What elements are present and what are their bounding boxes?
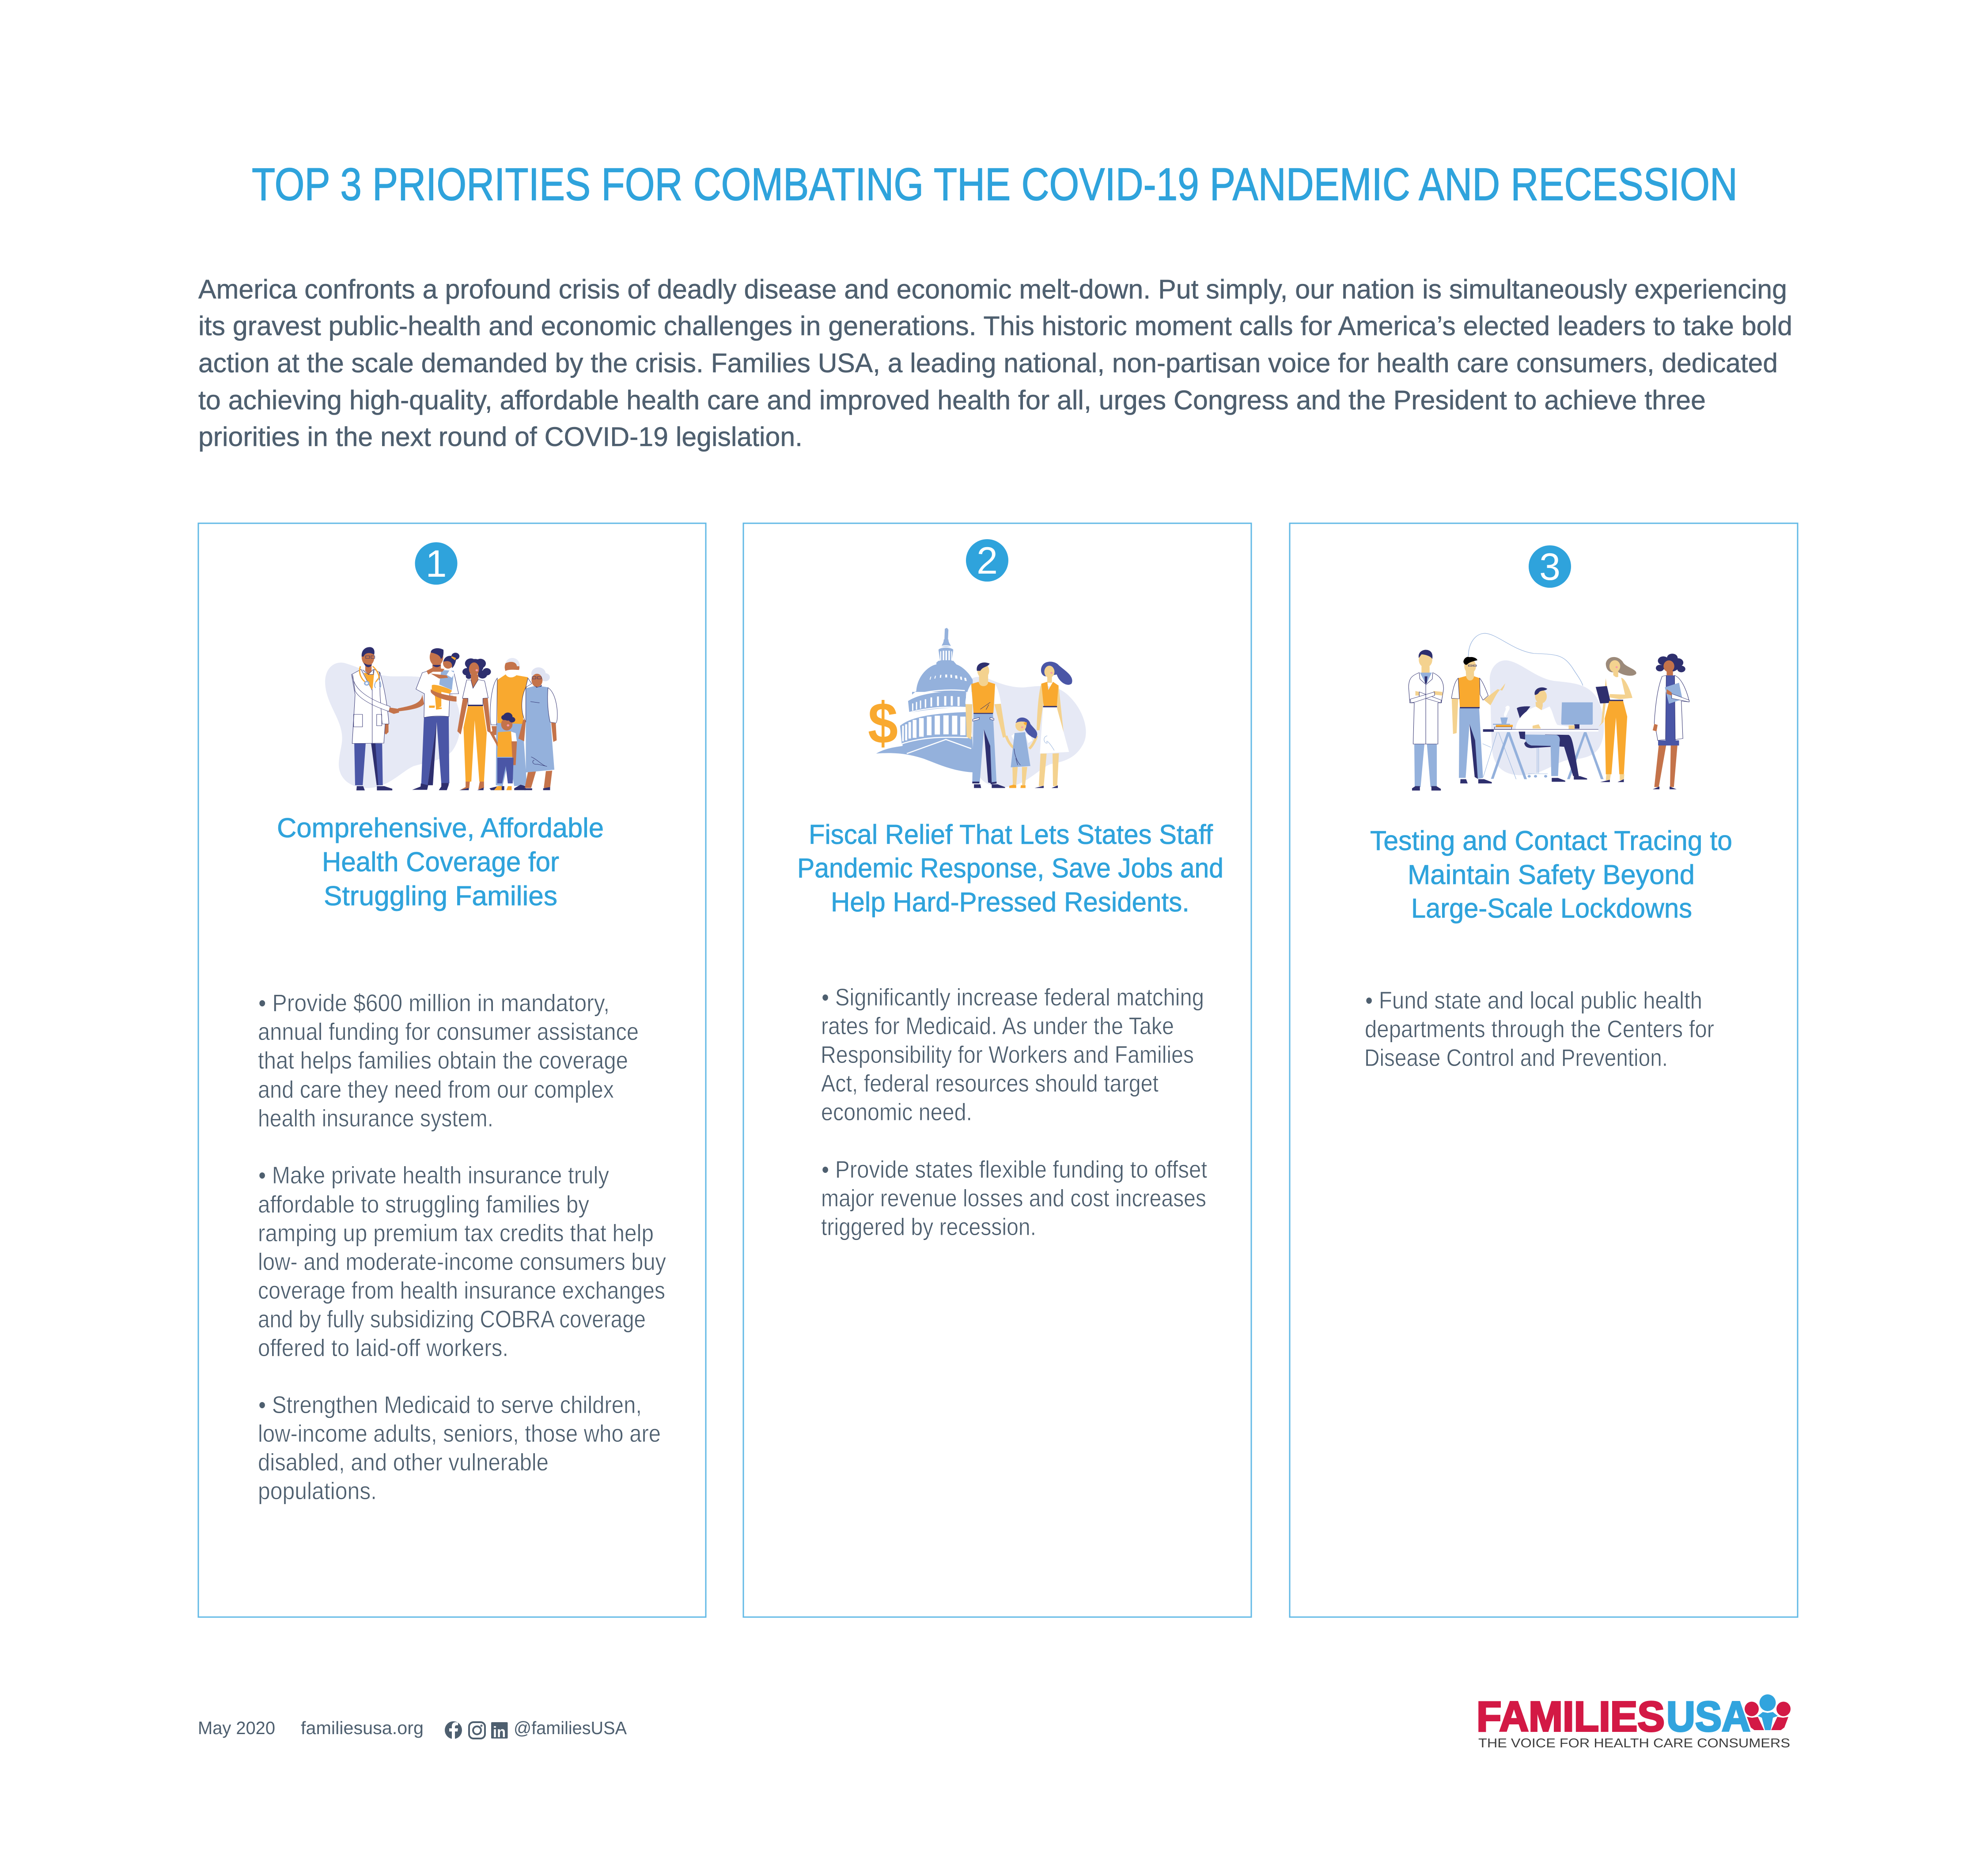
bullet text 1: and by fully subsidizing COBRA coverage <box>258 1305 646 1333</box>
panel: priority 1 <box>198 523 706 1617</box>
heading 1: Health Coverage for <box>322 847 559 877</box>
bullet text 2: Act, federal resources should target <box>821 1070 1159 1097</box>
bullet text 1: and care they need from our complex <box>258 1076 614 1103</box>
number badge 3: 3 <box>1539 546 1560 588</box>
bullet text 1: offered to laid-off workers. <box>258 1334 508 1361</box>
bullet text 3: • Fund state and local public health <box>1365 986 1702 1014</box>
icon: linkedin: in <box>493 1724 506 1741</box>
logo: Families USA: FAMILIES <box>1477 1693 1665 1740</box>
number badge 1: 1 <box>426 543 447 585</box>
heading 1 <box>277 813 604 911</box>
bullet text 1: • Make private health insurance truly <box>258 1161 609 1189</box>
bullet text 2 <box>821 983 1207 1240</box>
bullet text 1: ramping up premium tax credits that help <box>258 1219 654 1247</box>
icon: dollar sign: $ <box>868 691 898 756</box>
number badge 2: 2 <box>977 540 998 582</box>
intro paragraph: priorities in the next round of COVID-19 legislation. <box>198 422 803 452</box>
logo: Families USA: USA <box>1666 1693 1750 1740</box>
icon: facebook <box>445 1721 462 1739</box>
heading 3: Testing and Contact Tracing to <box>1370 826 1732 856</box>
intro paragraph: to achieving high-quality, affordable health care and improved health for all, urges Congress and the President to achieve three <box>198 385 1706 415</box>
number badge 2 <box>966 539 1008 582</box>
number badge 3 <box>1529 545 1571 588</box>
logo: Families USA: THE VOICE FOR HEALTH CARE CONSUMERS <box>1478 1736 1790 1750</box>
bullet text 2: • Provide states flexible funding to offset <box>822 1156 1207 1183</box>
bullet text 1: health insurance system. <box>258 1104 493 1132</box>
intro paragraph <box>198 274 1792 452</box>
panel: priority 2 <box>743 523 1251 1617</box>
bullet text 2: • Significantly increase federal matching <box>822 983 1204 1011</box>
bullet text 1: that helps families obtain the coverage <box>258 1047 628 1074</box>
intro paragraph: its gravest public-health and economic challenges in generations. This historic moment calls for America’s elected leaders to take bold <box>198 311 1792 341</box>
intro paragraph: action at the scale demanded by the crisis. Families USA, a leading national, non-partisan voice for health care consumers, dedicated <box>198 348 1778 378</box>
bullet text 1: populations. <box>258 1477 377 1504</box>
bullet text 1: • Strengthen Medicaid to serve children, <box>258 1391 642 1418</box>
heading 2: Help Hard-Pressed Residents. <box>831 887 1189 918</box>
bullet text 3 <box>1364 986 1714 1071</box>
bullet text 1: low- and moderate-income consumers buy <box>258 1248 666 1275</box>
heading 3: Large-Scale Lockdowns <box>1411 893 1692 924</box>
heading 2 <box>797 820 1223 918</box>
footer website: familiesusa.org <box>301 1718 424 1738</box>
heading 3: Maintain Safety Beyond <box>1408 860 1695 890</box>
bullet text 2: rates for Medicaid. As under the Take <box>821 1012 1174 1039</box>
number badge 1 <box>415 542 458 585</box>
heading 3 <box>1370 826 1732 924</box>
bullet text 1 <box>258 989 666 1504</box>
bullet text 3: departments through the Centers for <box>1365 1015 1714 1043</box>
footer date: May 2020 <box>198 1718 275 1738</box>
heading 1: Comprehensive, Affordable <box>277 813 604 843</box>
illustration: doctor greeting a family <box>325 647 557 790</box>
title: TOP 3 PRIORITIES FOR COMBATING THE COVID-19 PANDEMIC AND RECESSION <box>252 159 1738 210</box>
heading 1: Struggling Families <box>324 881 557 911</box>
footer social handle: @familiesUSA <box>514 1718 627 1738</box>
logo: Families USA <box>1477 1693 1791 1750</box>
bullet text 1: coverage from health insurance exchanges <box>258 1277 665 1304</box>
bullet text 2: major revenue losses and cost increases <box>821 1184 1206 1212</box>
bullet text 2: triggered by recession. <box>821 1213 1036 1240</box>
heading 2: Pandemic Response, Save Jobs and <box>797 853 1223 884</box>
bullet text 1: annual funding for consumer assistance <box>258 1018 639 1045</box>
illustration: capitol building and family <box>876 628 1086 788</box>
bullet text 2: economic need. <box>821 1098 972 1126</box>
bullet text 1: affordable to struggling families by <box>258 1191 589 1218</box>
panel: priority 3 <box>1290 523 1798 1617</box>
bullet text 1: • Provide $600 million in mandatory, <box>258 989 610 1017</box>
bullet text 3: Disease Control and Prevention. <box>1364 1044 1668 1071</box>
heading 2: Fiscal Relief That Lets States Staff <box>809 820 1213 850</box>
bullet text 1: low-income adults, seniors, those who are <box>258 1420 661 1447</box>
bullet text 1: disabled, and other vulnerable <box>258 1448 549 1476</box>
icon: instagram <box>469 1722 485 1739</box>
intro paragraph: America confronts a profound crisis of deadly disease and economic melt-down. Put simply, our nation is simultaneously experiencing <box>198 274 1787 304</box>
bullet text 2: Responsibility for Workers and Families <box>821 1041 1194 1068</box>
illustration: health workers at a desk <box>1409 633 1689 790</box>
